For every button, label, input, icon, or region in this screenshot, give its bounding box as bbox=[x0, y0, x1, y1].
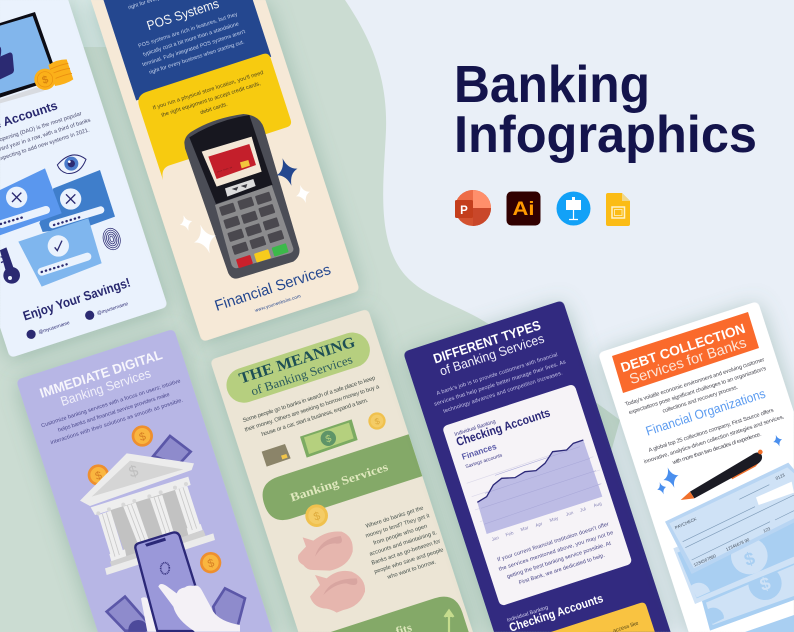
text block: POS description: terminal. Fully integrated POS systems aren't bbox=[142, 29, 247, 68]
icon: card terminal: **** **** ** bbox=[216, 166, 234, 175]
icon: paycheck and bills bbox=[665, 463, 794, 632]
icon: PowerPoint bbox=[455, 190, 491, 226]
website: www.yourwebsite.com bbox=[254, 293, 301, 313]
icon: piggy banks bbox=[298, 531, 365, 613]
icon: paycheck and bills: 0123 bbox=[775, 472, 786, 481]
text block: financial organizations copy: A global top 25 collections company, First Source offers bbox=[648, 408, 775, 454]
panel: online accounts card bbox=[0, 0, 168, 358]
heading: enjoy your savings: Enjoy Your Savings! bbox=[21, 275, 132, 323]
icon: login panels bbox=[0, 168, 115, 287]
icon: paycheck and bills: PAYCHECK bbox=[674, 516, 697, 530]
label: individual banking second: Individual Banking bbox=[506, 605, 549, 624]
text block: financial institution note bbox=[495, 521, 620, 591]
icon: laptop and coins: $ bbox=[41, 74, 50, 87]
heading: finances: Finances bbox=[460, 441, 498, 462]
icon: card, banknote and coins: $ bbox=[312, 510, 323, 524]
text block: bank's job: technology advances and competition increases. bbox=[443, 370, 564, 415]
area chart: savings accounts bbox=[467, 440, 603, 542]
heading: financial services: Financial Services bbox=[213, 261, 333, 315]
heading: immediate digital: IMMEDIATE DIGITAL bbox=[38, 347, 164, 401]
text block: where banks get money: money to lend? They get it bbox=[365, 513, 431, 540]
text block: yellow callout copy: debit cards. bbox=[200, 101, 229, 116]
title bbox=[454, 56, 757, 164]
icon: Illustrator bbox=[506, 192, 540, 226]
icon: card, banknote and coins bbox=[262, 412, 386, 527]
area chart: savings accounts: Apr bbox=[535, 521, 543, 528]
icon: Illustrator: Ai bbox=[512, 199, 534, 220]
text block: financial organizations copy: innovative, analytics-driven collection strategies and services, bbox=[643, 414, 785, 465]
heading: financial organizations: Financial Organizations bbox=[644, 386, 768, 439]
icon: bank with phone, coins and bills bbox=[80, 425, 245, 632]
icon: paycheck and bills: 1234567890 bbox=[693, 553, 717, 568]
text block: yellow callout copy bbox=[152, 70, 270, 130]
text block: where banks get money bbox=[359, 504, 447, 584]
social handles: @myusername bbox=[96, 301, 129, 317]
text block: bank's job: A bank's job is to provide customers with financial bbox=[436, 352, 558, 397]
subheading: of banking services: of Banking Services bbox=[438, 331, 546, 379]
icon: paycheck and bills: $ bbox=[757, 573, 773, 595]
icon: card, banknote and coins: $ bbox=[373, 416, 381, 427]
text block: digital banking intro: Customize banking services with a focus on users; intuitive bbox=[41, 378, 181, 429]
text block: bank's job bbox=[431, 350, 570, 417]
heading: debt collection: DEBT COLLECTION bbox=[619, 321, 747, 375]
text block: meaning intro: house or a car, start a business, expand a farm. bbox=[261, 398, 370, 438]
text block: where banks get money: accounts and maintaining it. bbox=[369, 530, 438, 558]
text block: POS description bbox=[124, 0, 250, 77]
icon: Keynote bbox=[556, 192, 590, 226]
text block: financial institution note: First Bank, we are dedicated to help. bbox=[518, 553, 606, 586]
icon: paycheck and bills: 123 bbox=[762, 526, 772, 534]
icon: Google Slides bbox=[606, 193, 630, 226]
text block: digital banking intro: helps banks and financial service providers make bbox=[57, 392, 171, 434]
area chart: savings accounts: Mar bbox=[520, 525, 530, 532]
title: Infographics bbox=[454, 106, 757, 164]
text block: meaning intro: their money. Others are seeking to borrow money to buy a bbox=[244, 384, 381, 433]
icon: PowerPoint: P bbox=[460, 205, 468, 217]
social handles bbox=[25, 298, 130, 340]
area chart: savings accounts: Jun bbox=[565, 510, 574, 517]
area chart: savings accounts: May bbox=[549, 515, 559, 523]
icon: sparkles bbox=[177, 155, 313, 257]
text block: meaning intro bbox=[241, 375, 384, 443]
yellow callout bbox=[136, 52, 296, 180]
icon: key bbox=[1, 248, 20, 284]
panel: different types of banking services card bbox=[403, 300, 671, 632]
area chart: savings accounts: Aug bbox=[593, 501, 603, 508]
banner: benefits bbox=[331, 591, 469, 632]
area chart: savings accounts: Feb bbox=[505, 530, 514, 538]
subheading: of banking services: of Banking Services bbox=[249, 352, 354, 398]
panel: checking accounts white card bbox=[442, 384, 633, 606]
area chart: savings accounts: Jul bbox=[579, 506, 586, 513]
text block: yellow callout copy: the right equipment to accept credit cards, bbox=[161, 81, 262, 119]
title pill bbox=[222, 328, 374, 407]
icon: pen and sparkles bbox=[655, 434, 784, 500]
icon: laptop and coins bbox=[0, 12, 73, 103]
icon: bank with phone, coins and bills: $ bbox=[127, 463, 141, 482]
text block: where banks get money: from people who open bbox=[373, 524, 428, 547]
icon: paycheck and bills: $ bbox=[742, 548, 757, 570]
text block: debt collection intro: expectations pose significant challenges to an organization's bbox=[628, 366, 767, 416]
blue section bbox=[103, 0, 271, 101]
text block: POS description: typically cost a bit more than a standalone bbox=[142, 21, 240, 58]
subheading: banking services: Banking Services bbox=[59, 365, 153, 409]
text block: meaning intro: Some people go to banks in search of a safe place to keep bbox=[242, 375, 376, 424]
panel: yellow note bbox=[551, 601, 655, 632]
panel: meaning of banking services card bbox=[210, 309, 473, 632]
panel: immediate digital banking card bbox=[16, 329, 272, 632]
text block: debt collection intro: collections and recovery process. bbox=[662, 384, 739, 415]
social handles: @myusername bbox=[38, 320, 71, 336]
heading: the meaning: THE MEANING bbox=[237, 334, 357, 387]
banner: orange title bbox=[612, 312, 759, 393]
text block: yellow callout copy: If you run a physical store location, you'll need bbox=[152, 70, 264, 112]
panel: debt collection card bbox=[598, 301, 794, 632]
banner: banking services bbox=[257, 434, 422, 525]
heading: different types: DIFFERENT TYPES bbox=[431, 318, 543, 366]
area chart: savings accounts: Jan bbox=[491, 535, 500, 542]
text block: financial institution note: getting the best banking service possible. At bbox=[506, 541, 612, 580]
text block: POS description: POS systems are rich in features, but they bbox=[138, 12, 239, 49]
icon: paycheck and bills: 12345678 90 bbox=[725, 537, 751, 552]
label: individual banking: Individual Banking bbox=[454, 419, 497, 438]
text block: bank's job: services that help people better manage their lives. As bbox=[434, 359, 567, 408]
text block: POS description: right for every business when starting out. bbox=[149, 39, 245, 76]
icon: eye bbox=[57, 155, 86, 173]
title: Banking bbox=[454, 56, 650, 114]
panel: POS systems card bbox=[91, 0, 360, 342]
icon: bank with phone, coins and bills: $ bbox=[206, 557, 217, 571]
icon: card terminal bbox=[184, 114, 300, 279]
text block: where banks get money: who want to borrow. bbox=[386, 559, 437, 581]
icon: up arrow bbox=[444, 610, 454, 632]
icon: card, banknote and coins: $ bbox=[324, 433, 333, 446]
text block: financial institution note: If your current financial institution doesn't offer bbox=[497, 521, 610, 563]
heading: banking services: Banking Services bbox=[288, 460, 390, 505]
heading: checking accounts: Checking Accounts bbox=[454, 405, 552, 449]
text block: where banks get money: Banks act as go-between for bbox=[371, 539, 441, 567]
icon: bank with phone, coins and bills: $ bbox=[138, 430, 148, 444]
text block: digital banking intro: interactions with their solutions as smooth as possible. bbox=[50, 397, 184, 446]
icon: fingerprint bbox=[100, 226, 123, 252]
text block: where banks get money: people who save and people bbox=[374, 547, 444, 575]
subheading: services for banks: Services for Banks bbox=[628, 335, 749, 388]
label: savings accounts: Savings accounts bbox=[465, 452, 504, 470]
text block: financial organizations copy: with more than two decades of experience. bbox=[671, 432, 763, 466]
text block: financial institution note: the services mentioned above, you may not be bbox=[498, 530, 614, 573]
text block: debt collection intro: Today's volatile economic environment and evolving customer bbox=[625, 357, 765, 408]
icon: bank with phone, coins and bills: $ bbox=[94, 469, 104, 483]
text block: where banks get money: Where do banks get the bbox=[365, 505, 424, 530]
